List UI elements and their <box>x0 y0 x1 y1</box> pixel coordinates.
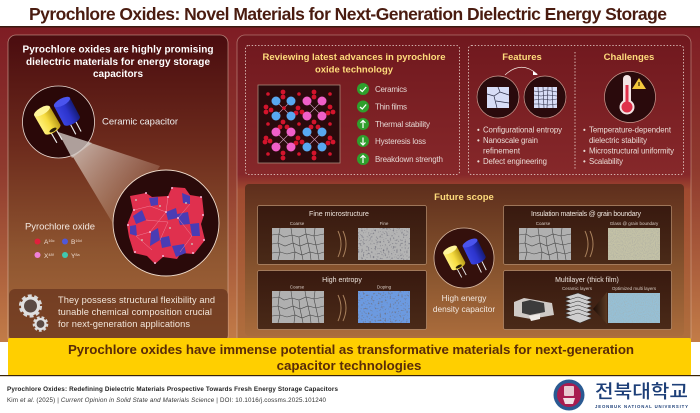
high energy density capacitor <box>433 228 495 314</box>
university logo: 전북대학교 <box>595 381 688 402</box>
challenges list: • <box>583 157 586 166</box>
future scope heading: Future scope <box>434 192 494 203</box>
challenges heading: Challenges <box>604 52 654 63</box>
card: high entropy: Coarse <box>290 284 305 290</box>
flexibility callout <box>9 289 228 341</box>
ceramic capacitor circle <box>22 86 94 158</box>
card: high entropy <box>258 270 426 330</box>
crystal legend: X <box>44 253 48 260</box>
panel: features and challenges <box>468 46 684 174</box>
conclusion banner <box>0 338 700 376</box>
crystal legend: 48f <box>48 253 55 257</box>
high energy density capacitor: density capacitor <box>433 304 495 314</box>
crystal legend: Pyrochlore oxide <box>25 222 95 232</box>
challenges list: • <box>583 146 586 156</box>
university logo: JEONBUK NATIONAL UNIVERSITY <box>595 404 688 409</box>
features list: refinement <box>483 146 521 156</box>
intro heading: Pyrochlore oxides are highly promising <box>22 44 214 56</box>
icon: gears <box>20 296 47 331</box>
intro heading: dielectric materials for energy storage <box>26 57 210 68</box>
conclusion banner: Pyrochlore oxides have immense potential as transformative materials for next-generation <box>68 342 634 357</box>
features list: Defect engineering <box>483 157 547 166</box>
card: high entropy: High entropy <box>322 277 362 284</box>
crystal legend: A <box>44 239 48 246</box>
capacitor label: Ceramic capacitor <box>102 116 178 128</box>
challenges list: Scalability <box>589 157 623 166</box>
features heading: Features <box>502 52 542 63</box>
advances heading: Reviewing latest advances in pyrochlore <box>262 52 446 63</box>
advances list: Thermal stability <box>375 120 430 129</box>
main background <box>0 26 700 342</box>
crystal legend: Y <box>71 253 75 260</box>
icon: thermometer warning <box>604 72 656 122</box>
callout text: tunable chemical composition crucial <box>58 307 212 317</box>
features list: Configurational entropy <box>483 126 562 134</box>
card: fine microstructure: Coarse <box>290 221 305 226</box>
challenges list: dielectric stability <box>589 136 647 145</box>
callout text: for next-generation applications <box>58 319 190 329</box>
card: fine microstructure: Fine microstructure <box>309 211 369 218</box>
advances list: Breakdown strength <box>375 155 443 164</box>
card: insulation materials: Insulation materials @ grain boundary <box>531 211 642 218</box>
card: fine microstructure: Fine <box>380 221 389 226</box>
crystal lattice diagram <box>258 85 340 163</box>
intro heading: capacitors <box>93 69 143 80</box>
panel: latest advances <box>246 46 460 174</box>
panel: review and outlook <box>237 35 691 345</box>
crystal legend: 16d <box>75 239 82 243</box>
advances list: Thin films <box>375 102 407 112</box>
pyrochlore crystal circle <box>113 170 219 276</box>
card: multilayer: Multilayer (thick film) <box>555 277 619 284</box>
advances heading: oxide technology <box>315 64 394 76</box>
features list: • <box>477 136 480 145</box>
title: Pyrochlore Oxides: Novel Materials for Next-Generation Dielectric Energy Storage <box>29 4 667 24</box>
advances list: Hysteresis loss <box>375 137 426 146</box>
features list: • <box>477 126 480 134</box>
features list: • <box>477 157 480 166</box>
challenges list: • <box>583 126 586 134</box>
crystal legend: 16c <box>48 239 55 243</box>
card: insulation materials <box>504 206 672 264</box>
icon: grain refinement <box>477 67 566 118</box>
card: multilayer <box>504 270 672 330</box>
crystal legend <box>25 222 95 260</box>
citation: Pyrochlore Oxides: Redefining Dielectric Materials Prospective Towards Fresh Energy Storage Capacitors <box>7 386 338 393</box>
card: high entropy: Doping <box>377 284 392 290</box>
card: multilayer: Ceramic layers <box>562 286 593 291</box>
card: insulation materials: Coarse <box>536 221 551 226</box>
challenges list: Temperature-dependent <box>589 126 672 134</box>
callout text: They possess structural flexibility and <box>58 295 215 305</box>
card: multilayer: Optimized multi layers <box>612 286 657 291</box>
citation <box>7 386 338 404</box>
magnification beam <box>58 132 160 232</box>
advances list <box>357 83 443 165</box>
features list: Nanoscale grain <box>483 136 538 145</box>
advances list: Ceramics <box>375 85 407 94</box>
citation: Kim et al. (2025) | Current Opinion in Solid State and Materials Science | DOI: 10.1016/j.cossms.2025.101240 <box>7 397 327 404</box>
university logo <box>554 380 688 410</box>
conclusion banner: capacitor technologies <box>277 358 421 373</box>
crystal legend: 8a <box>75 253 80 257</box>
card: insulation materials: Glass @ grain boundary <box>610 221 659 226</box>
panel: future scope <box>245 184 684 336</box>
panel: introduction <box>8 35 228 345</box>
challenges list: Microstructural uniformity <box>589 146 674 156</box>
card: fine microstructure <box>258 206 426 264</box>
crystal legend: B <box>71 239 75 246</box>
high energy density capacitor: High energy <box>442 293 487 303</box>
